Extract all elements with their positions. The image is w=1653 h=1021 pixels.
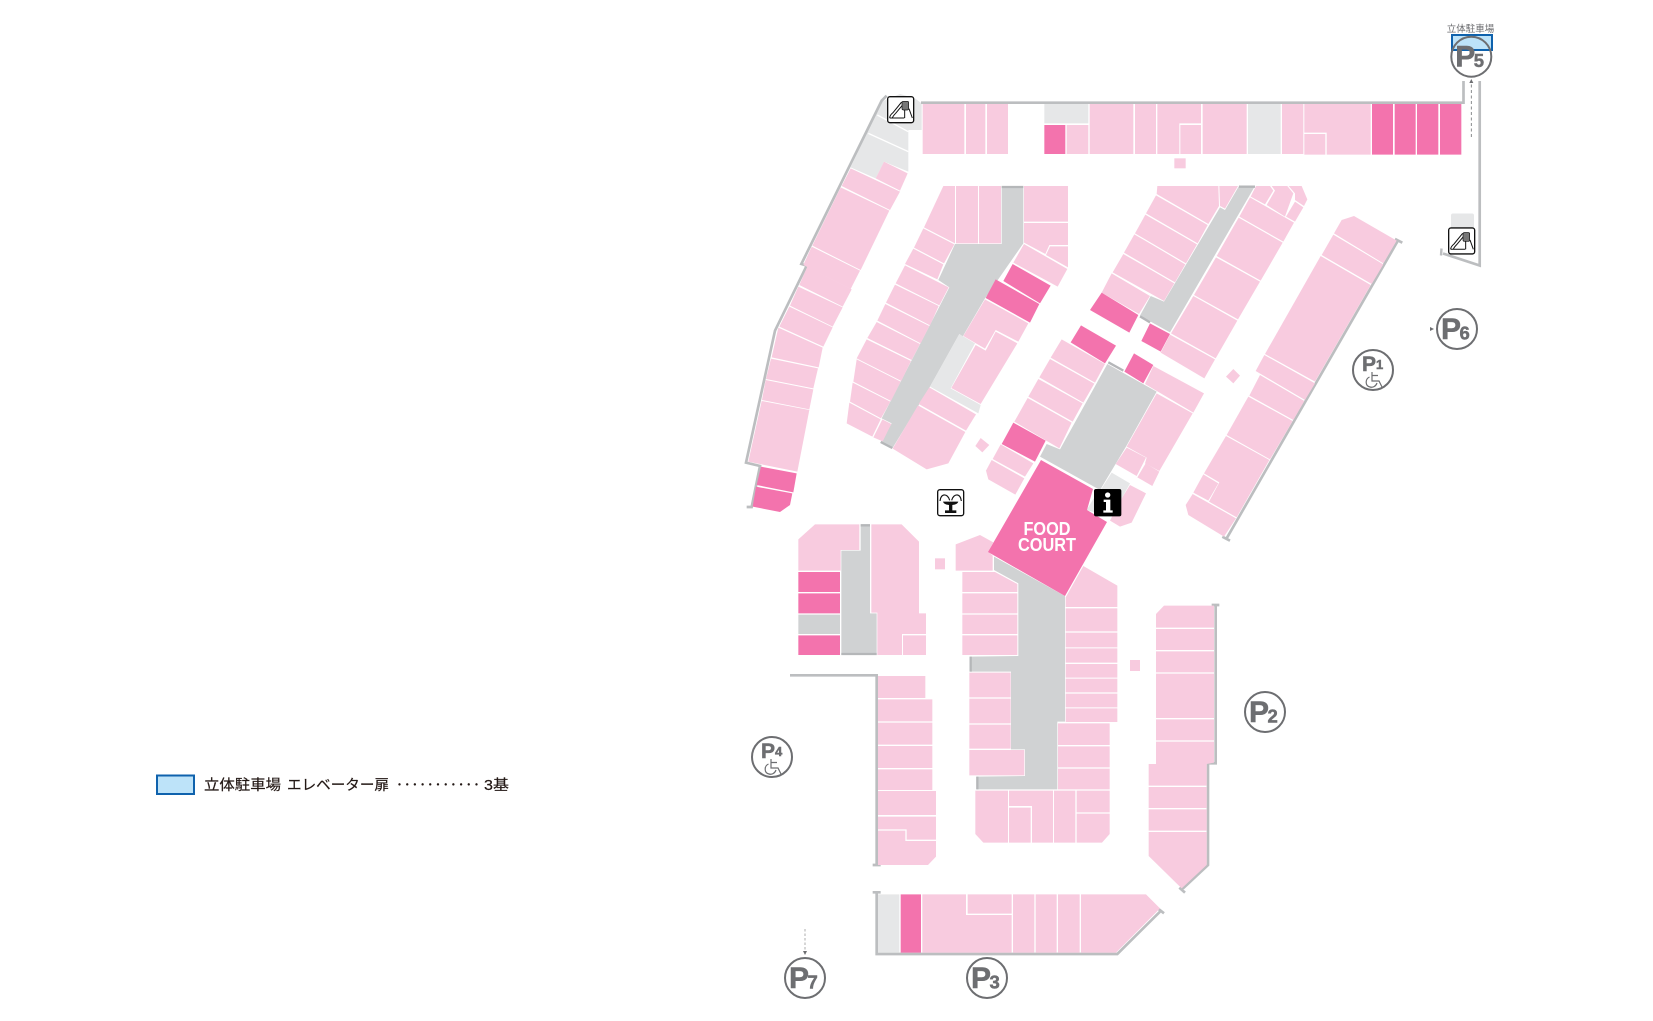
centre-left highlighted shops xyxy=(986,264,1051,323)
food court shape xyxy=(988,460,1107,596)
south row shops xyxy=(878,894,1160,953)
elevator door marker xyxy=(1452,35,1492,50)
central corridor xyxy=(1040,364,1157,490)
parking P7: 7 xyxy=(808,972,818,992)
north-centre block xyxy=(1090,186,1307,383)
service area dividers xyxy=(868,115,908,152)
central block xyxy=(1002,325,1204,527)
parking P2: 2 xyxy=(1268,706,1278,726)
south-west wall xyxy=(790,675,881,865)
parking P7 xyxy=(785,958,825,998)
legend count: 3基 xyxy=(484,777,510,794)
icon: fountain xyxy=(938,490,964,516)
parking P1 accessible xyxy=(1353,350,1393,390)
centre-left block xyxy=(847,186,1068,469)
legend text: 立体駐車場 xyxy=(204,777,281,794)
parking P4 accessible: P xyxy=(761,740,775,763)
dashed arrow to P5 xyxy=(1469,79,1473,137)
P5 text: P xyxy=(1455,41,1475,74)
dashed arrow to P7 xyxy=(803,929,807,955)
north-centre shops xyxy=(1102,186,1307,383)
food court: COURT xyxy=(1018,534,1077,555)
south-west wing xyxy=(790,675,936,865)
south-west highlighted shops xyxy=(798,572,840,655)
south row wall xyxy=(873,892,1164,954)
south-west corridor xyxy=(841,524,877,655)
west wing highlighted shops xyxy=(753,467,797,512)
parking P4 accessible: 4 xyxy=(775,744,783,759)
east wing shops xyxy=(1186,216,1397,537)
food court xyxy=(988,460,1107,596)
food court label: FOOD xyxy=(1024,518,1070,539)
south-centre corridor xyxy=(970,557,1065,789)
south-west small block xyxy=(798,524,945,655)
icon: information xyxy=(1094,489,1121,516)
south-centre block xyxy=(956,535,1140,843)
central shops xyxy=(1014,339,1204,527)
parking P1 accessible: 1 xyxy=(1376,357,1383,372)
north-west wing xyxy=(746,94,922,512)
parking P3: P xyxy=(971,962,991,995)
P5 circle xyxy=(1451,37,1491,77)
parking P5 with elevator xyxy=(1447,23,1495,77)
north-centre highlighted shops xyxy=(1090,293,1170,352)
wing walls xyxy=(746,96,887,507)
parking P2 xyxy=(1245,692,1285,732)
parking P6: 6 xyxy=(1460,322,1470,344)
light grey service area xyxy=(851,94,922,178)
parking P3: 3 xyxy=(990,972,1000,992)
top row far east shops xyxy=(1304,104,1461,155)
south-east wing xyxy=(1149,605,1219,893)
legend swatch xyxy=(157,776,194,794)
light grey L-shaped area xyxy=(930,334,981,413)
parking P3 xyxy=(967,958,1007,998)
light grey area above escalator xyxy=(1451,214,1474,230)
top and north-east walls xyxy=(921,81,1480,266)
south-east wall xyxy=(1179,605,1219,893)
parking P2: P xyxy=(1249,696,1269,729)
north-centre corridor xyxy=(1140,186,1255,332)
parking P6 xyxy=(1430,309,1477,349)
south-east shops xyxy=(1149,606,1214,888)
top row west shops xyxy=(923,104,1008,154)
centre-left shops xyxy=(847,186,1068,469)
parking P6: P xyxy=(1441,313,1461,346)
legend: parking elevator door xyxy=(157,776,510,794)
east long wing xyxy=(1186,216,1402,541)
parking P4 accessible xyxy=(752,737,792,777)
icon: escalator north-west xyxy=(888,97,914,123)
south-centre shops xyxy=(956,535,1140,843)
centre-left corridor xyxy=(881,186,1023,448)
parking P1 accessible: P xyxy=(1362,353,1376,376)
legend leader dots: ･･･････････ xyxy=(396,777,480,793)
south-west shops xyxy=(798,524,945,655)
top row east shops xyxy=(1044,104,1303,168)
east wing wall xyxy=(1222,239,1402,541)
south row wing xyxy=(873,892,1164,954)
parking P5 with elevator: 5 xyxy=(1474,50,1484,71)
P5 label above: 立体駐車場 xyxy=(1447,23,1495,35)
west wing shops xyxy=(748,162,908,472)
light grey area by information xyxy=(1087,473,1130,517)
parking P7: P xyxy=(789,962,809,995)
south-west wing shops xyxy=(878,676,936,865)
icon: escalator north-east xyxy=(1449,228,1475,254)
top row shops xyxy=(923,104,1461,168)
central highlighted shops xyxy=(1002,325,1153,462)
legend text: elevator door: エレベーター扉 xyxy=(287,777,389,794)
shops beside food court xyxy=(986,444,1033,495)
